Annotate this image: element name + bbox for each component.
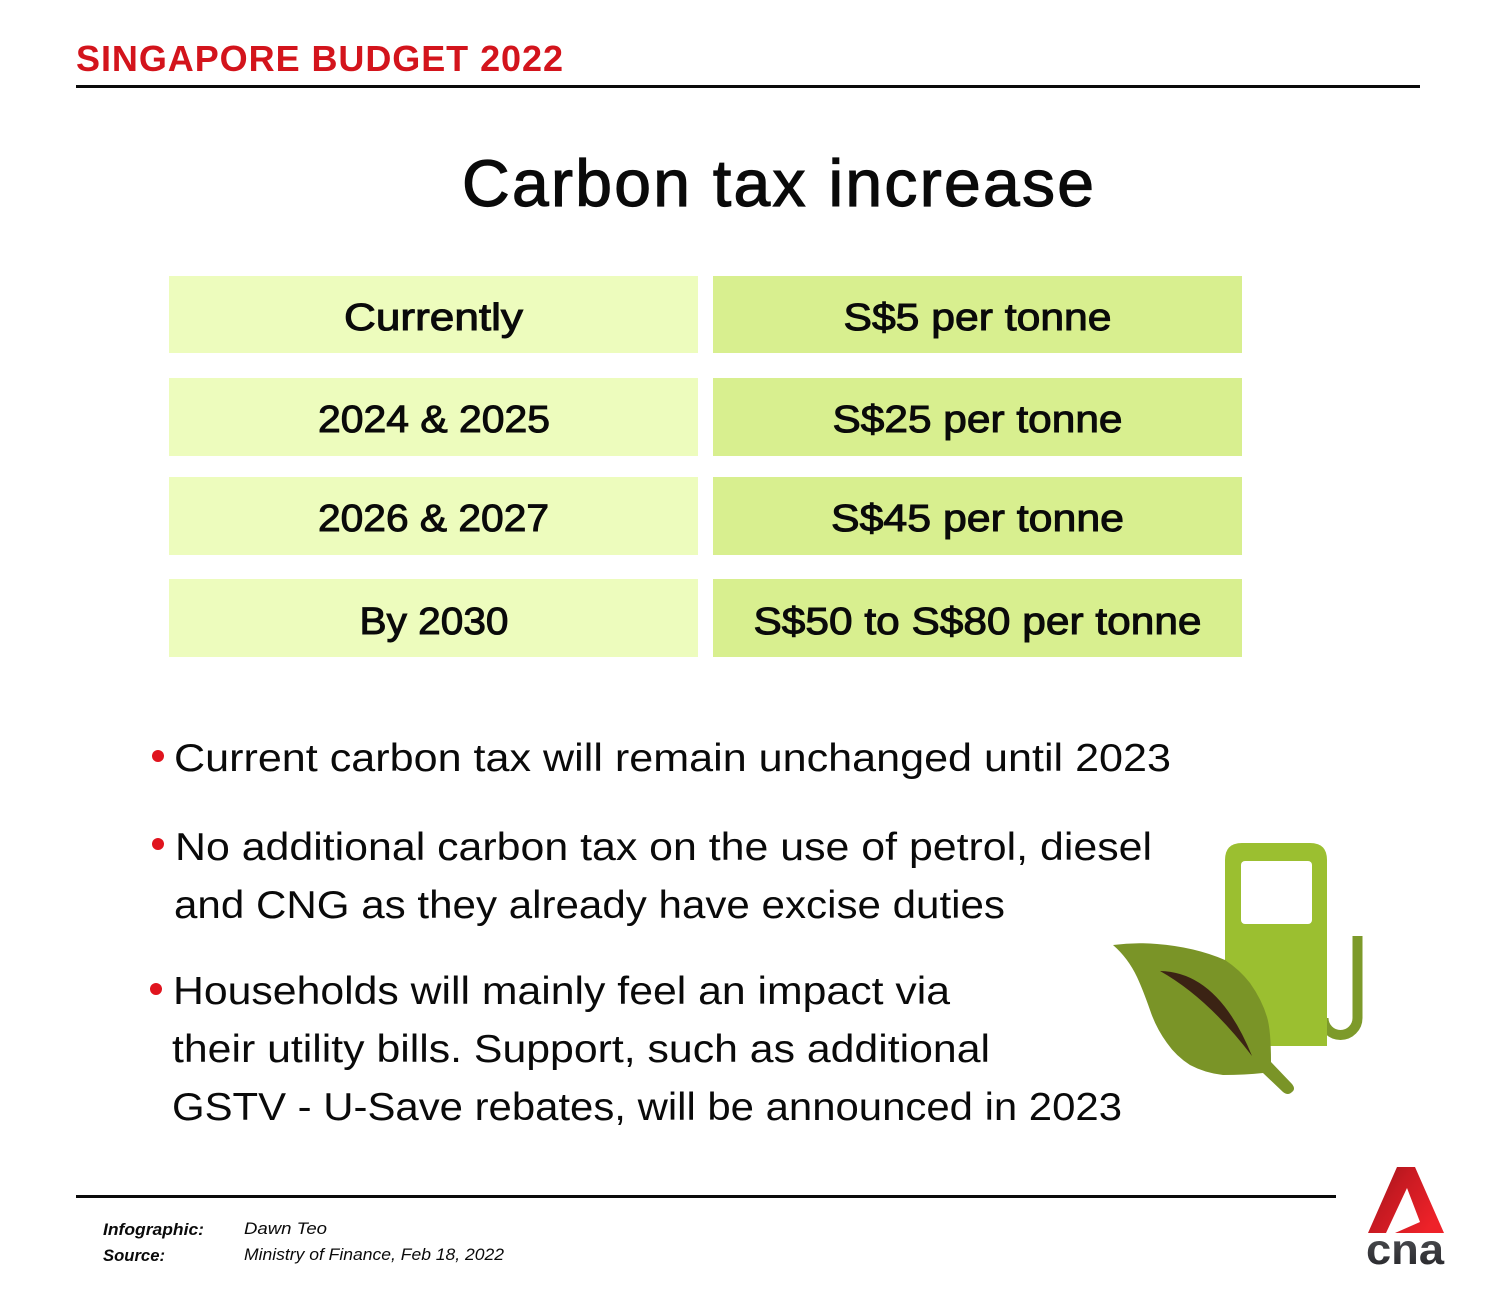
header: Singapore Budget 2022: SINGAPORE BUDGET 2022 xyxy=(76,38,563,79)
table: carbon tax schedule xyxy=(169,276,1242,657)
bullet 2 xyxy=(152,826,1152,927)
leaf vein xyxy=(1160,971,1252,1056)
bullet 3: their utility bills. Support, such as additional xyxy=(172,1028,990,1071)
footer credits: Dawn Teo xyxy=(244,1219,327,1238)
bullet 2: and CNG as they already have excise duties xyxy=(174,884,1005,927)
footer credits: Source: xyxy=(103,1246,165,1265)
row: 2024 and 2025: S$25 per tonne xyxy=(832,399,1122,441)
bullet 2: No additional carbon tax on the use of petrol, diesel xyxy=(175,826,1152,869)
icon: fuel pump with leaf xyxy=(1113,843,1358,1094)
logo wordmark: cna xyxy=(1366,1226,1445,1274)
row: 2026 and 2027: 2026 & 2027 xyxy=(318,498,549,540)
fuel pump window xyxy=(1241,861,1312,924)
leaf xyxy=(1113,943,1294,1094)
row: 2024 and 2025: 2024 & 2025 xyxy=(318,399,550,441)
bullet 3: Households will mainly feel an impact via xyxy=(173,970,950,1013)
footer credits: Ministry of Finance, Feb 18, 2022 xyxy=(244,1245,505,1264)
row: 2026 and 2027: S$45 per tonne xyxy=(831,498,1124,540)
row: 2024 and 2025 xyxy=(169,378,1242,456)
footer credits xyxy=(103,1219,505,1265)
row: 2026 and 2027 xyxy=(169,477,1242,555)
logo: CNA xyxy=(1366,1167,1445,1274)
row: currently: Currently xyxy=(344,297,523,339)
title: Carbon tax increase xyxy=(462,146,1094,220)
row: by 2030 xyxy=(169,579,1242,657)
row: currently xyxy=(169,276,1242,353)
row: by 2030: S$50 to S$80 per tonne xyxy=(754,601,1202,643)
logo mark xyxy=(1368,1167,1444,1233)
bullet 1: Current carbon tax will remain unchanged until 2023 xyxy=(174,737,1171,780)
row: currently: S$5 per tonne xyxy=(844,297,1112,339)
bullet 3: GSTV - U-Save rebates, will be announced in 2023 xyxy=(172,1086,1122,1129)
bullet 3 xyxy=(150,970,1122,1129)
row: by 2030: By 2030 xyxy=(360,601,508,643)
fuel pump body xyxy=(1225,843,1327,1046)
footer credits: Infographic: xyxy=(103,1220,204,1239)
fuel pump hose xyxy=(1324,936,1358,1035)
